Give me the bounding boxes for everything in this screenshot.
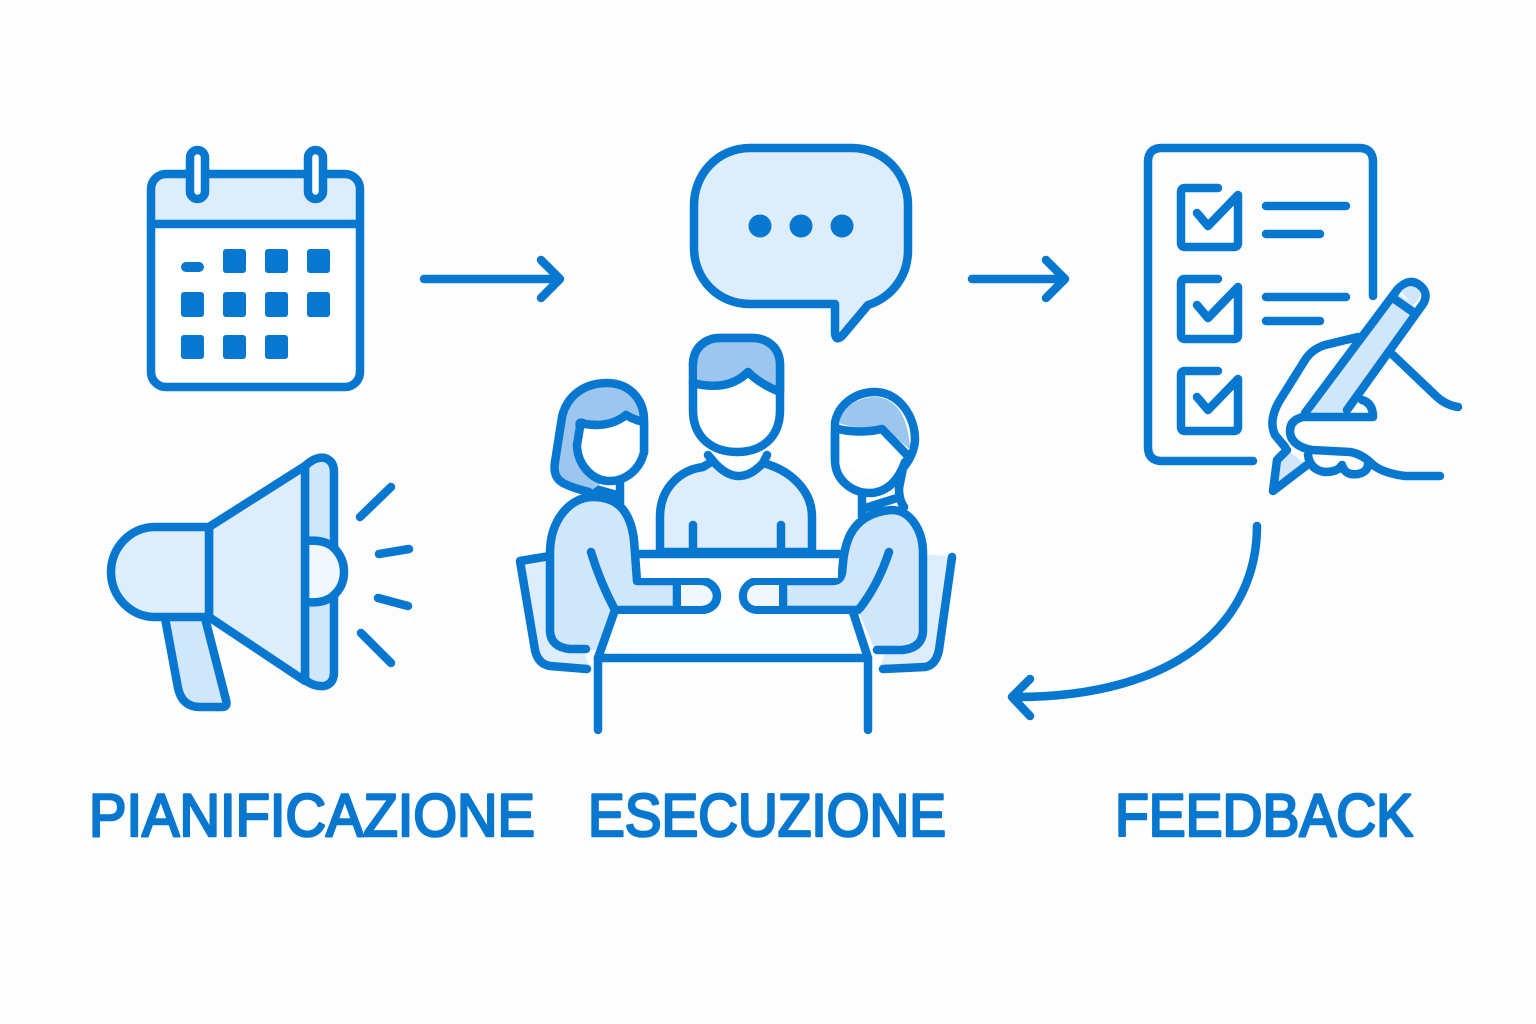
icon: calendar	[151, 150, 360, 387]
label: esecuzione: ESECUZIONE	[588, 782, 946, 849]
icon: checklist with hand and pencil	[1148, 148, 1458, 491]
arrow: execution to feedback	[972, 260, 1065, 298]
icon: speech bubble	[694, 148, 908, 338]
center person	[660, 338, 812, 552]
icon: megaphone	[111, 458, 409, 707]
left person	[550, 383, 717, 650]
label: feedback: FEEDBACK	[1115, 782, 1413, 849]
hand	[1272, 337, 1458, 476]
pencil	[1273, 282, 1426, 491]
sound lines	[360, 487, 409, 663]
right person	[743, 392, 923, 650]
label: pianificazione: PIANIFICAZIONE	[89, 782, 535, 849]
megaphone cone	[209, 466, 305, 681]
arrow: feedback back to execution	[1012, 526, 1257, 716]
megaphone dome	[305, 541, 344, 602]
checklist sheet	[1148, 148, 1373, 461]
table	[598, 554, 868, 730]
megaphone rim	[305, 458, 334, 686]
left chair	[520, 556, 590, 669]
checklist rows	[1181, 188, 1346, 431]
arrow: planning to execution	[424, 260, 560, 298]
icon: team meeting	[520, 338, 952, 730]
megaphone handle	[165, 618, 226, 707]
megaphone body	[111, 527, 209, 617]
right chair	[880, 553, 952, 669]
